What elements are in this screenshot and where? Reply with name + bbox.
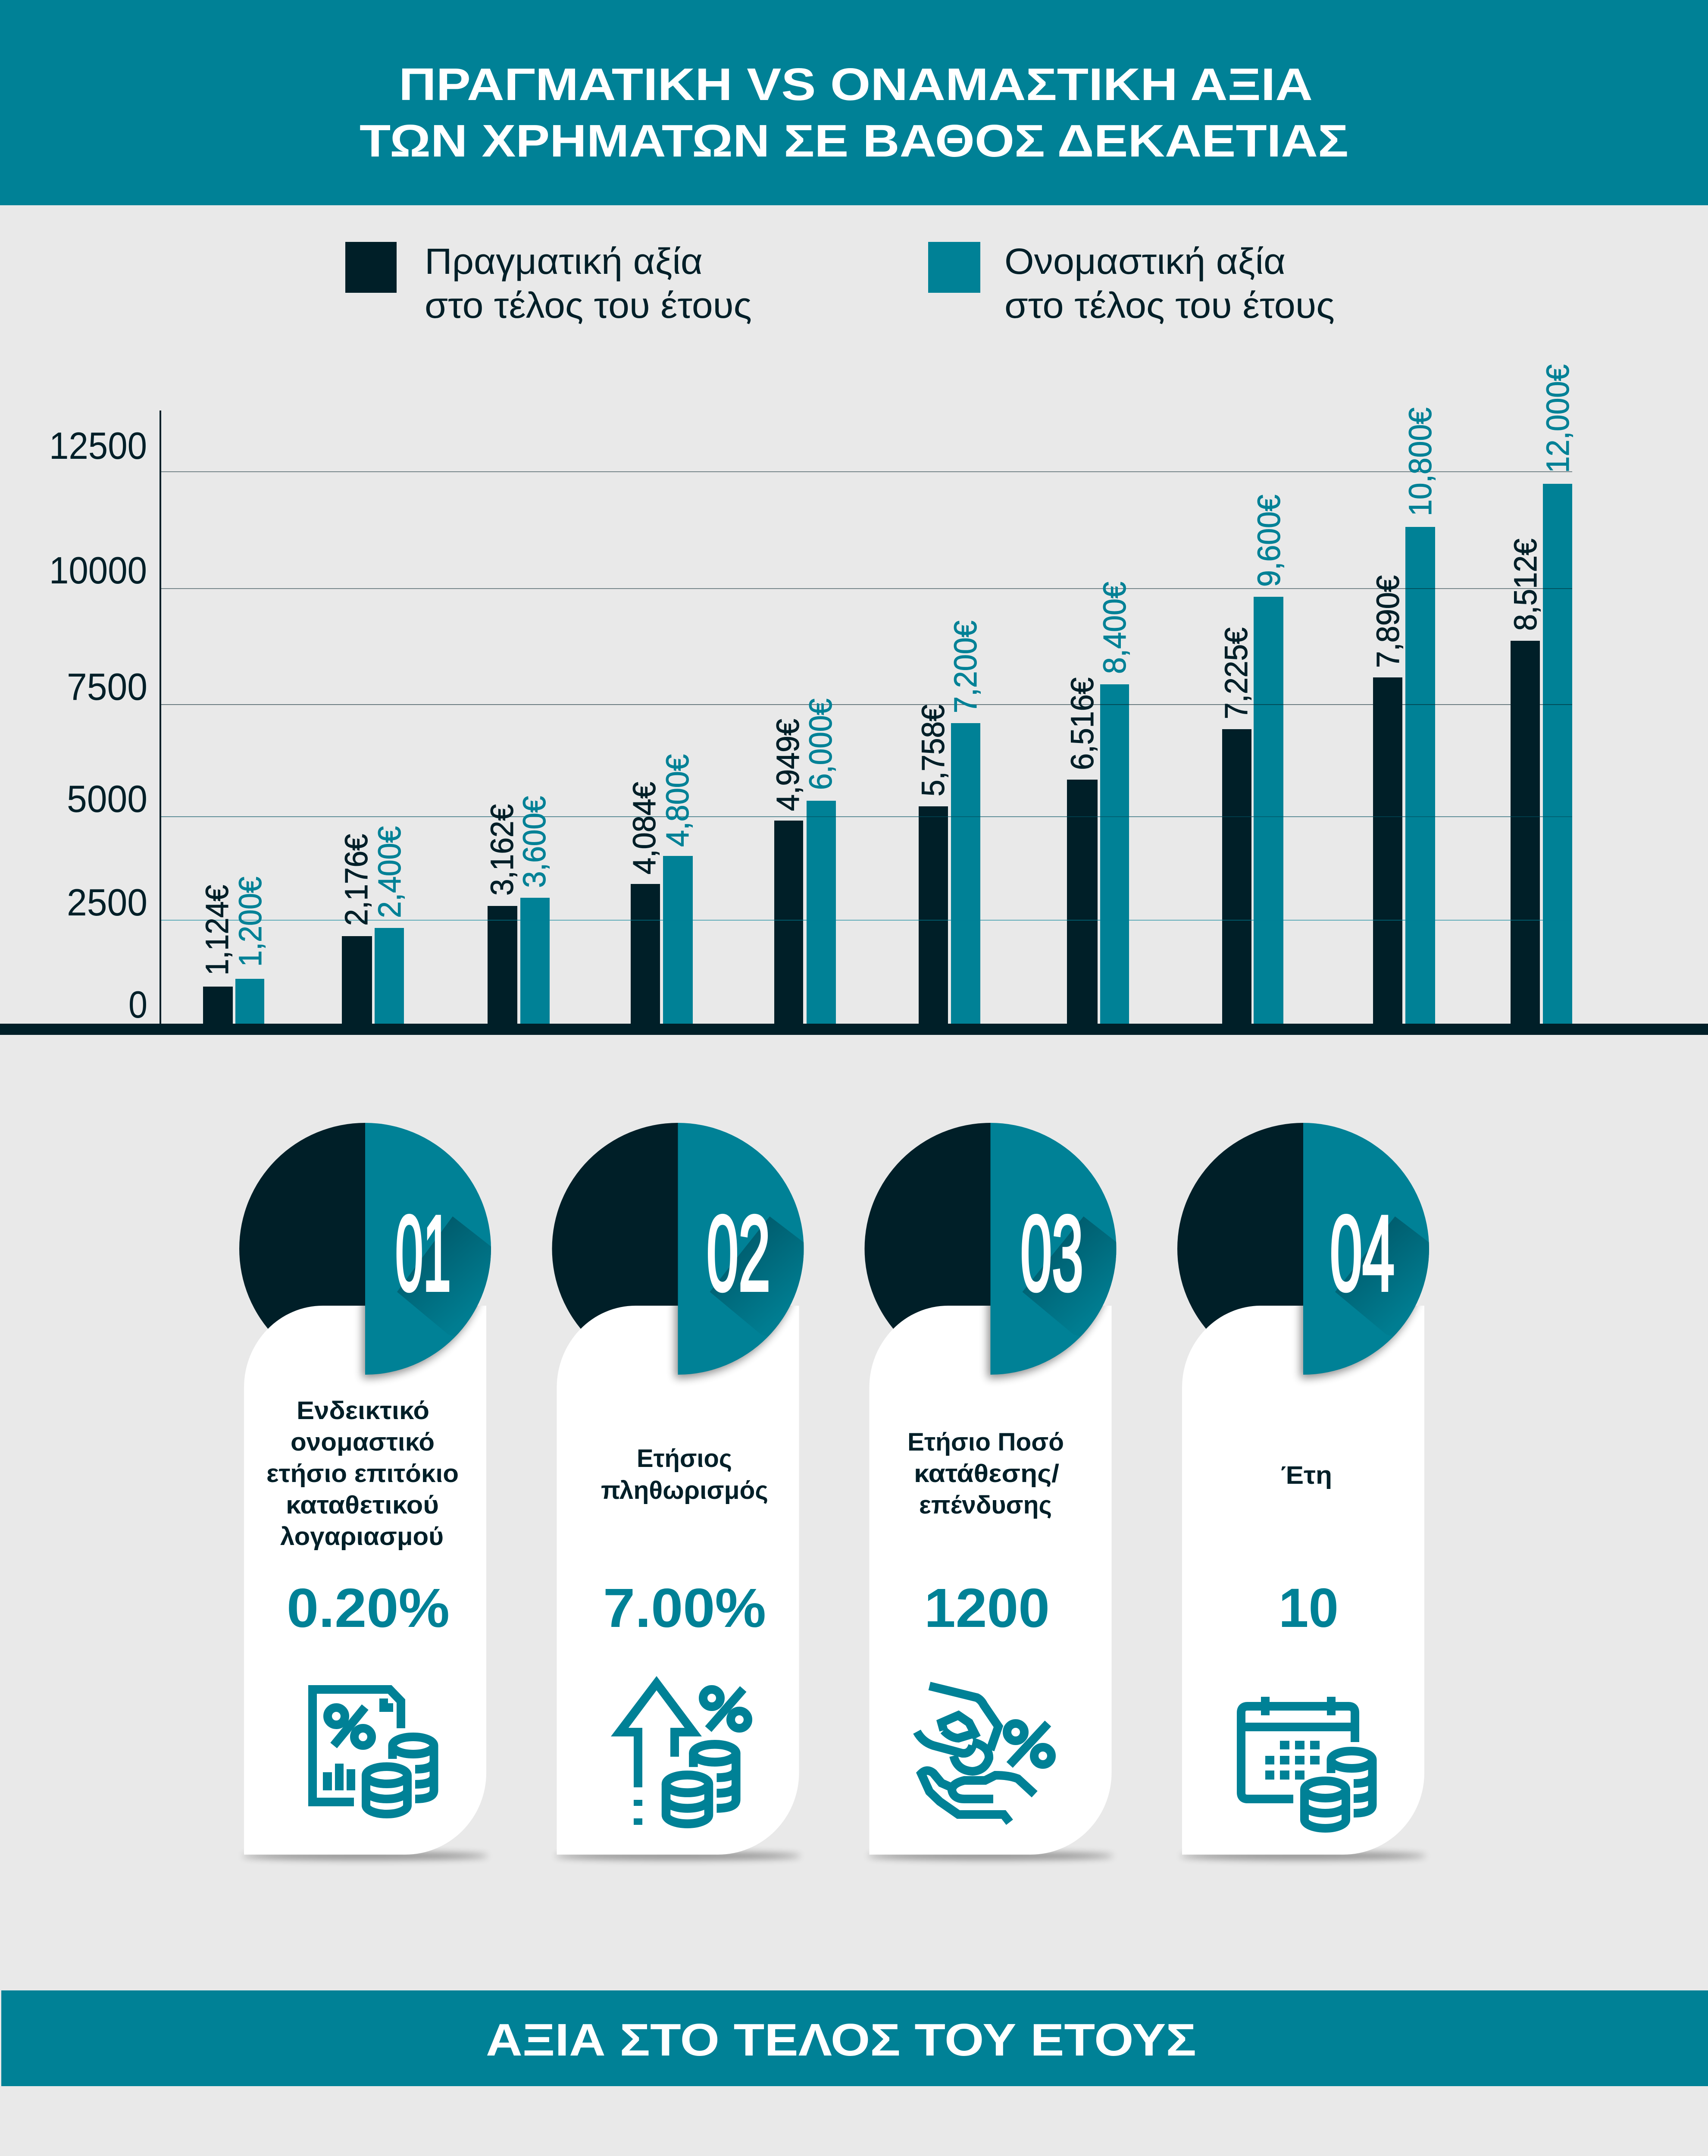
nominal value labels	[232, 364, 1576, 967]
panel: card 01: 01	[395, 1193, 451, 1313]
section banner: value at year end: ΑΞΙΑ ΣΤΟ ΤΕΛΟΣ ΤΟΥ ΕΤΟΥΣ	[486, 2015, 1196, 2065]
nominal value labels: 12,000€	[1540, 364, 1576, 473]
label	[266, 1397, 459, 1551]
legend: nominal value	[928, 241, 1335, 326]
number 04: 04	[1330, 1193, 1395, 1313]
label: ετήσιο επιτόκιο	[266, 1460, 459, 1488]
y axis labels: 10000	[49, 549, 147, 592]
icon: hands with coin and percent	[917, 1686, 1051, 1822]
real value labels: 2,176€	[338, 834, 374, 926]
label: Έτη	[1281, 1461, 1332, 1489]
real value labels: 1,124€	[199, 885, 235, 975]
real value labels: 6,516€	[1064, 677, 1100, 770]
panel: card 04	[1177, 1123, 1442, 1860]
real value labels	[199, 539, 1543, 975]
nominal value labels: 9,600€	[1251, 495, 1287, 587]
y axis labels	[49, 424, 147, 1026]
legend: real value: στο τέλος του έτους	[425, 285, 752, 326]
teal bars	[235, 484, 1572, 1025]
real value labels: 8,512€	[1508, 539, 1543, 631]
value: 1200	[924, 1577, 1050, 1639]
y axis labels: 5000	[67, 777, 147, 820]
panel: card 01	[239, 1123, 504, 1860]
real value labels: 4,084€	[626, 782, 662, 874]
panel: card 03	[865, 1123, 1129, 1860]
label: Ενδεικτικό	[297, 1397, 429, 1425]
header banner	[0, 0, 1708, 205]
label: κατάθεσης/	[914, 1460, 1059, 1488]
label: πληθωρισμός	[601, 1476, 768, 1504]
nominal value labels: 4,800€	[660, 754, 695, 847]
label: επένδυσης	[919, 1491, 1052, 1519]
y axis labels: 7500	[67, 665, 147, 708]
y axis labels: 12500	[49, 424, 147, 467]
nominal value labels: 8,400€	[1097, 582, 1132, 674]
icon: calendar and coins	[1241, 1697, 1373, 1828]
panel: card 02	[552, 1123, 817, 1860]
bar chart	[0, 364, 1708, 1035]
nominal value labels: 7,200€	[948, 620, 983, 713]
legend: nominal value: στο τέλος του έτους	[1004, 285, 1335, 326]
dark bars	[203, 641, 1540, 1025]
number 03: 03	[1020, 1193, 1083, 1313]
label: καταθετικού	[286, 1491, 439, 1519]
label: Ετήσιος	[637, 1445, 732, 1473]
number 02: 02	[707, 1193, 770, 1313]
icon: document with percent and coins	[313, 1689, 434, 1814]
real value labels: 3,162€	[484, 804, 520, 896]
section banner: value at year end	[1, 1990, 1708, 2086]
nominal value labels: 1,200€	[232, 877, 268, 967]
legend: nominal value: Ονομαστική αξία	[1004, 241, 1286, 282]
nominal value labels: 10,800€	[1402, 407, 1438, 516]
label	[907, 1428, 1064, 1519]
nominal value labels: 6,000€	[803, 699, 838, 790]
y axis labels: 0	[128, 983, 147, 1026]
label: ονομαστικό	[291, 1428, 435, 1456]
nominal value labels: 2,400€	[372, 826, 407, 918]
value: 10	[1279, 1577, 1339, 1639]
legend: real value: Πραγματική αξία	[425, 241, 703, 282]
label: Ετήσιο Ποσό	[907, 1428, 1064, 1456]
real value labels: 7,890€	[1370, 575, 1406, 668]
real value labels: 7,225€	[1218, 627, 1254, 719]
label	[601, 1445, 768, 1504]
y axis labels: 2500	[67, 881, 147, 924]
title	[360, 59, 1348, 166]
label: λογαριασμού	[280, 1523, 444, 1551]
title: ΤΩΝ ΧΡΗΜΑΤΩΝ ΣΕ ΒΑΘΟΣ ΔΕΚΑΕΤΙΑΣ	[360, 116, 1348, 166]
value: 0.20%	[287, 1577, 450, 1639]
real value labels: 4,949€	[770, 719, 806, 811]
title: ΠΡΑΓΜΑΤΙΚΗ VS ΟΝΑΜΑΣΤΙΚΗ ΑΞΙΑ	[399, 59, 1313, 110]
nominal value labels: 3,600€	[516, 796, 552, 888]
icon: up arrow with percent and coins	[611, 1676, 748, 1825]
legend: real value	[345, 241, 752, 326]
legend	[345, 241, 1335, 326]
real value labels: 5,758€	[915, 705, 951, 796]
value: 7.00%	[603, 1577, 766, 1639]
